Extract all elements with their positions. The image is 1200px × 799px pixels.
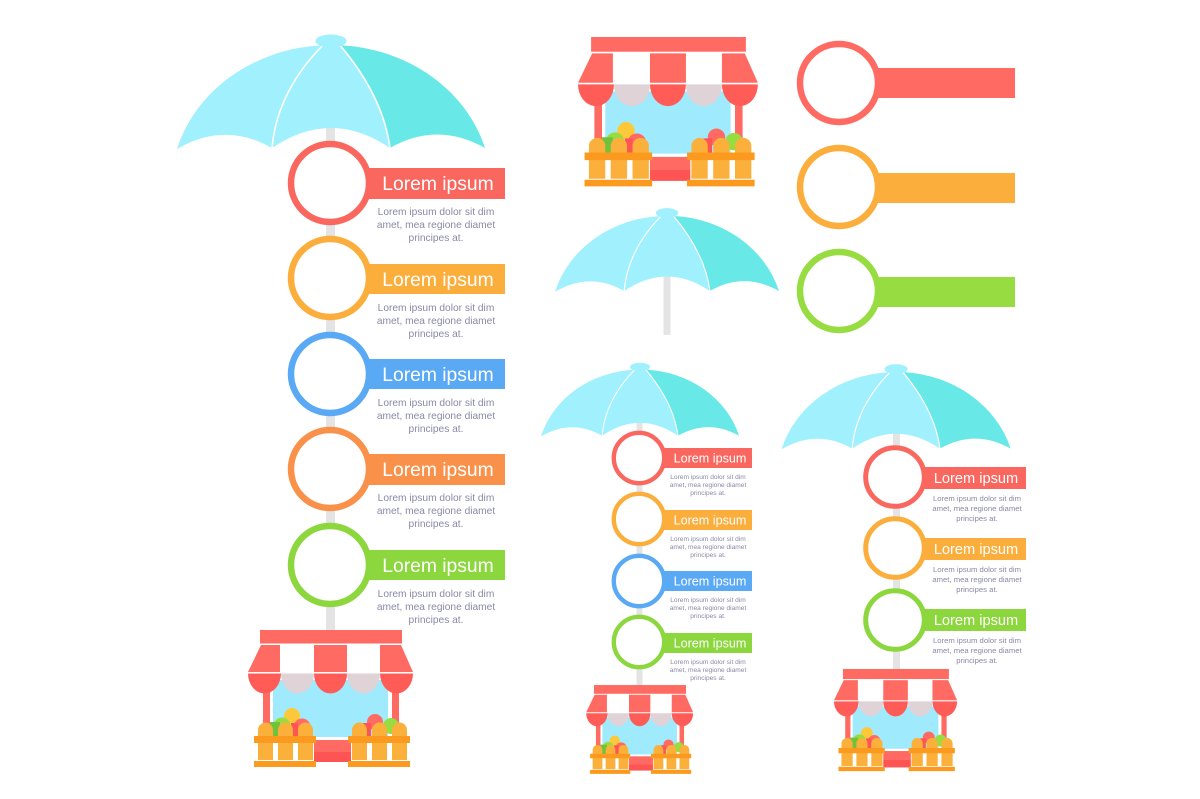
icon: large market stall [248,630,413,767]
step 3: amet, mea regione diamet [932,646,1023,655]
step 2: Lorem ipsum dolor sit dim [933,565,1021,574]
step 1: principes at. [956,514,998,523]
step 4: amet, mea regione diamet [670,667,746,674]
step 4 [291,430,505,530]
step 2: amet, mea regione diamet [932,575,1023,584]
step 4 [614,617,752,682]
icon: umbrella [781,364,1011,449]
step 3: principes at. [690,613,726,620]
step 2: principes at. [956,585,998,594]
step 5: Lorem ipsum dolor sit dim [378,589,494,600]
step 4: Lorem ipsum dolor sit dim [670,659,746,666]
blank red label [800,44,1015,122]
step 2 [291,239,505,340]
pole [326,125,335,635]
icon: market stall [834,669,957,771]
step 3 [866,591,1026,665]
step 1: Lorem ipsum [382,174,494,195]
step 3 [291,335,505,435]
step 2: amet, mea regione diamet [670,544,746,551]
step 1: Lorem ipsum dolor sit dim [378,207,494,218]
step 1 [866,448,1026,523]
icon: standalone market stall [578,37,758,186]
step 2: Lorem ipsum [382,270,494,291]
step 3: principes at. [956,656,998,665]
step 4: Lorem ipsum [674,636,746,650]
step 1: principes at. [690,490,726,497]
step 4: amet, mea regione diamet [377,506,495,517]
step 1: Lorem ipsum dolor sit dim [933,494,1021,503]
step 3: principes at. [409,424,463,435]
pole [893,430,900,675]
step 4: principes at. [409,519,463,530]
step 1: Lorem ipsum [674,452,746,466]
step 1: amet, mea regione diamet [932,504,1023,513]
step 2: Lorem ipsum dolor sit dim [670,536,746,543]
step 2: principes at. [690,552,726,559]
step 4: Lorem ipsum [382,460,494,481]
small infographic: four steps [541,363,752,774]
step 2: Lorem ipsum [934,542,1018,558]
blank orange label [800,148,1015,226]
step 1 [614,433,752,497]
step 2: Lorem ipsum [674,514,746,528]
blank green label [800,252,1015,330]
step 4: principes at. [690,675,726,682]
step 3: Lorem ipsum [674,574,746,588]
step 5 [291,526,505,626]
step 2: principes at. [409,329,463,340]
step 3: amet, mea regione diamet [377,411,495,422]
step 2: amet, mea regione diamet [377,316,495,327]
small infographic: three steps [781,364,1026,771]
step 3: Lorem ipsum dolor sit dim [378,398,494,409]
step 3: Lorem ipsum dolor sit dim [670,597,746,604]
step 1: Lorem ipsum [934,471,1018,487]
step 2 [614,494,752,559]
step 5: amet, mea regione diamet [377,602,495,613]
big infographic: five-step umbrella stall [177,34,505,767]
step 1: principes at. [409,233,463,244]
step 5: principes at. [409,615,463,626]
step 3: amet, mea regione diamet [670,605,746,612]
icon: large umbrella [177,34,485,149]
step 1: amet, mea regione diamet [670,482,746,489]
step 3 [614,556,752,620]
step 4: Lorem ipsum dolor sit dim [378,493,494,504]
step 1: amet, mea regione diamet [377,220,495,231]
step 2: Lorem ipsum dolor sit dim [378,303,494,314]
step 1 [291,144,505,244]
pole [636,420,642,690]
icon: umbrella [541,363,739,436]
standalone umbrella [555,208,779,335]
step 1: Lorem ipsum dolor sit dim [670,474,746,481]
icon: market stall [586,685,693,774]
step 3: Lorem ipsum dolor sit dim [933,636,1021,645]
step 2 [866,519,1026,594]
step 3: Lorem ipsum [382,365,494,386]
step 5: Lorem ipsum [382,556,494,577]
step 3: Lorem ipsum [934,613,1018,629]
